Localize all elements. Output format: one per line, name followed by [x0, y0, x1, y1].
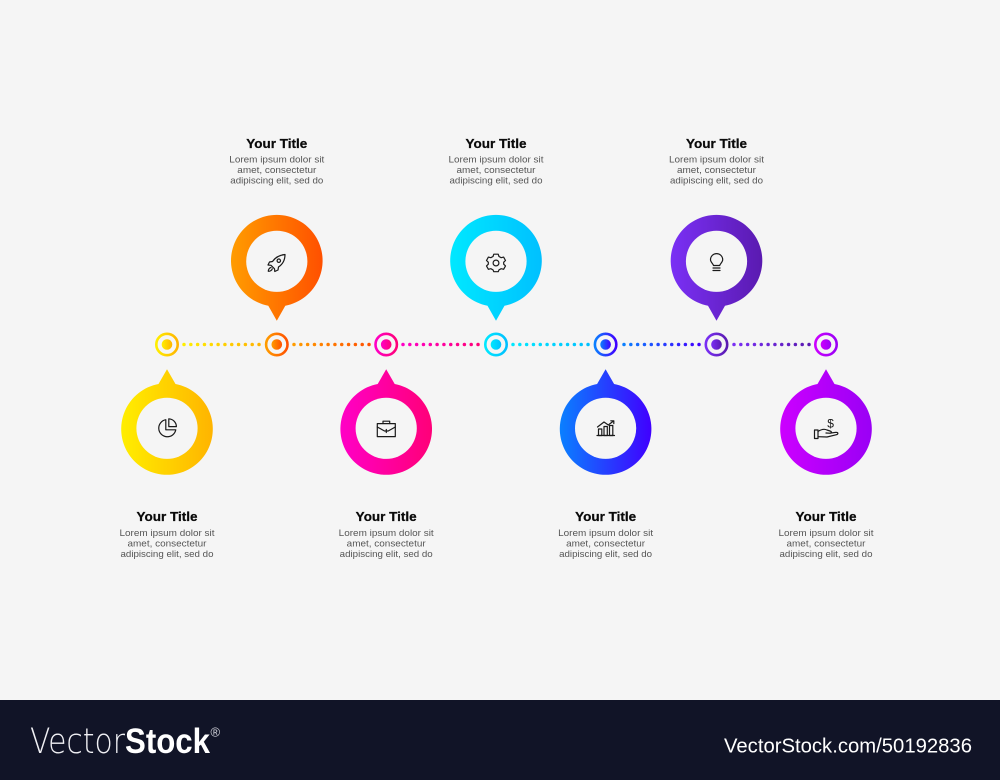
pin 6: purple	[671, 215, 762, 321]
logo: VectorStock	[30, 721, 220, 762]
text block: step 1: amet, consectetur	[128, 538, 206, 548]
footer bar	[0, 700, 1000, 780]
logo: VectorStock: Stock	[125, 721, 210, 761]
text block: step 1: Your Title	[136, 509, 198, 524]
text block: step 7: amet, consectetur	[786, 538, 866, 548]
icon: rocket	[268, 254, 285, 272]
pin 4: cyan	[450, 215, 542, 321]
text block: step 1	[120, 509, 215, 559]
icon: light bulb	[710, 254, 723, 270]
text block: step 7: Your Title	[796, 509, 856, 524]
dotted timeline	[184, 343, 810, 346]
text block: step 2: amet, consectetur	[237, 165, 316, 175]
text block: step 6	[669, 136, 764, 186]
pin 1: yellow	[121, 369, 213, 475]
node 3	[376, 334, 397, 355]
image id: VectorStock.com/50192836	[724, 736, 972, 758]
text block: step 7	[778, 509, 874, 559]
text block: step 4: Your Title	[466, 136, 526, 151]
text block: step 4: amet, consectetur	[456, 165, 536, 175]
pin 3: pink	[340, 369, 432, 475]
text block: step 3: Lorem ipsum dolor sit	[339, 528, 434, 538]
node 6	[706, 334, 727, 355]
icon: gear	[486, 254, 506, 272]
text block: step 3	[339, 509, 434, 559]
node 7	[815, 334, 837, 355]
text block: step 7: Lorem ipsum dolor sit	[778, 528, 874, 538]
icon: growth chart	[597, 421, 614, 436]
pin 5: blue	[560, 369, 651, 475]
icon: pie chart	[159, 419, 176, 437]
text block: step 4: adipiscing elit, sed do	[450, 176, 542, 186]
logo: VectorStock: ®	[210, 724, 220, 740]
node 4	[485, 334, 507, 355]
text block: step 6: Lorem ipsum dolor sit	[669, 154, 764, 164]
pin 7: violet	[780, 369, 872, 475]
text block: step 3: adipiscing elit, sed do	[340, 549, 433, 559]
text block: step 2	[229, 136, 325, 186]
text block: step 5: Your Title	[575, 509, 636, 524]
text block: step 6: amet, consectetur	[677, 165, 756, 175]
logo: VectorStock: Vector	[30, 722, 126, 762]
icon: briefcase	[377, 421, 395, 437]
text block: step 2: Your Title	[246, 136, 307, 151]
text block: step 6: adipiscing elit, sed do	[670, 176, 763, 186]
text block: step 5	[558, 509, 654, 559]
text block: step 1: Lorem ipsum dolor sit	[120, 528, 215, 538]
pin 2: orange	[231, 215, 323, 321]
node 5	[595, 334, 616, 355]
text block: step 5: adipiscing elit, sed do	[559, 549, 652, 559]
node 1	[156, 334, 178, 355]
text block: step 7: adipiscing elit, sed do	[780, 549, 872, 559]
text block: step 4	[448, 136, 544, 186]
text block: step 5: amet, consectetur	[566, 538, 645, 548]
text block: step 4: Lorem ipsum dolor sit	[448, 154, 544, 164]
text block: step 3: amet, consectetur	[347, 538, 426, 548]
text block: step 3: Your Title	[356, 509, 417, 524]
text block: step 2: adipiscing elit, sed do	[230, 176, 323, 186]
text block: step 5: Lorem ipsum dolor sit	[558, 528, 654, 538]
text block: step 6: Your Title	[686, 136, 747, 151]
text block: step 2: Lorem ipsum dolor sit	[229, 154, 325, 164]
node 2	[266, 334, 287, 355]
text block: step 1: adipiscing elit, sed do	[120, 549, 214, 559]
icon: hand with dollar: $	[827, 416, 834, 430]
